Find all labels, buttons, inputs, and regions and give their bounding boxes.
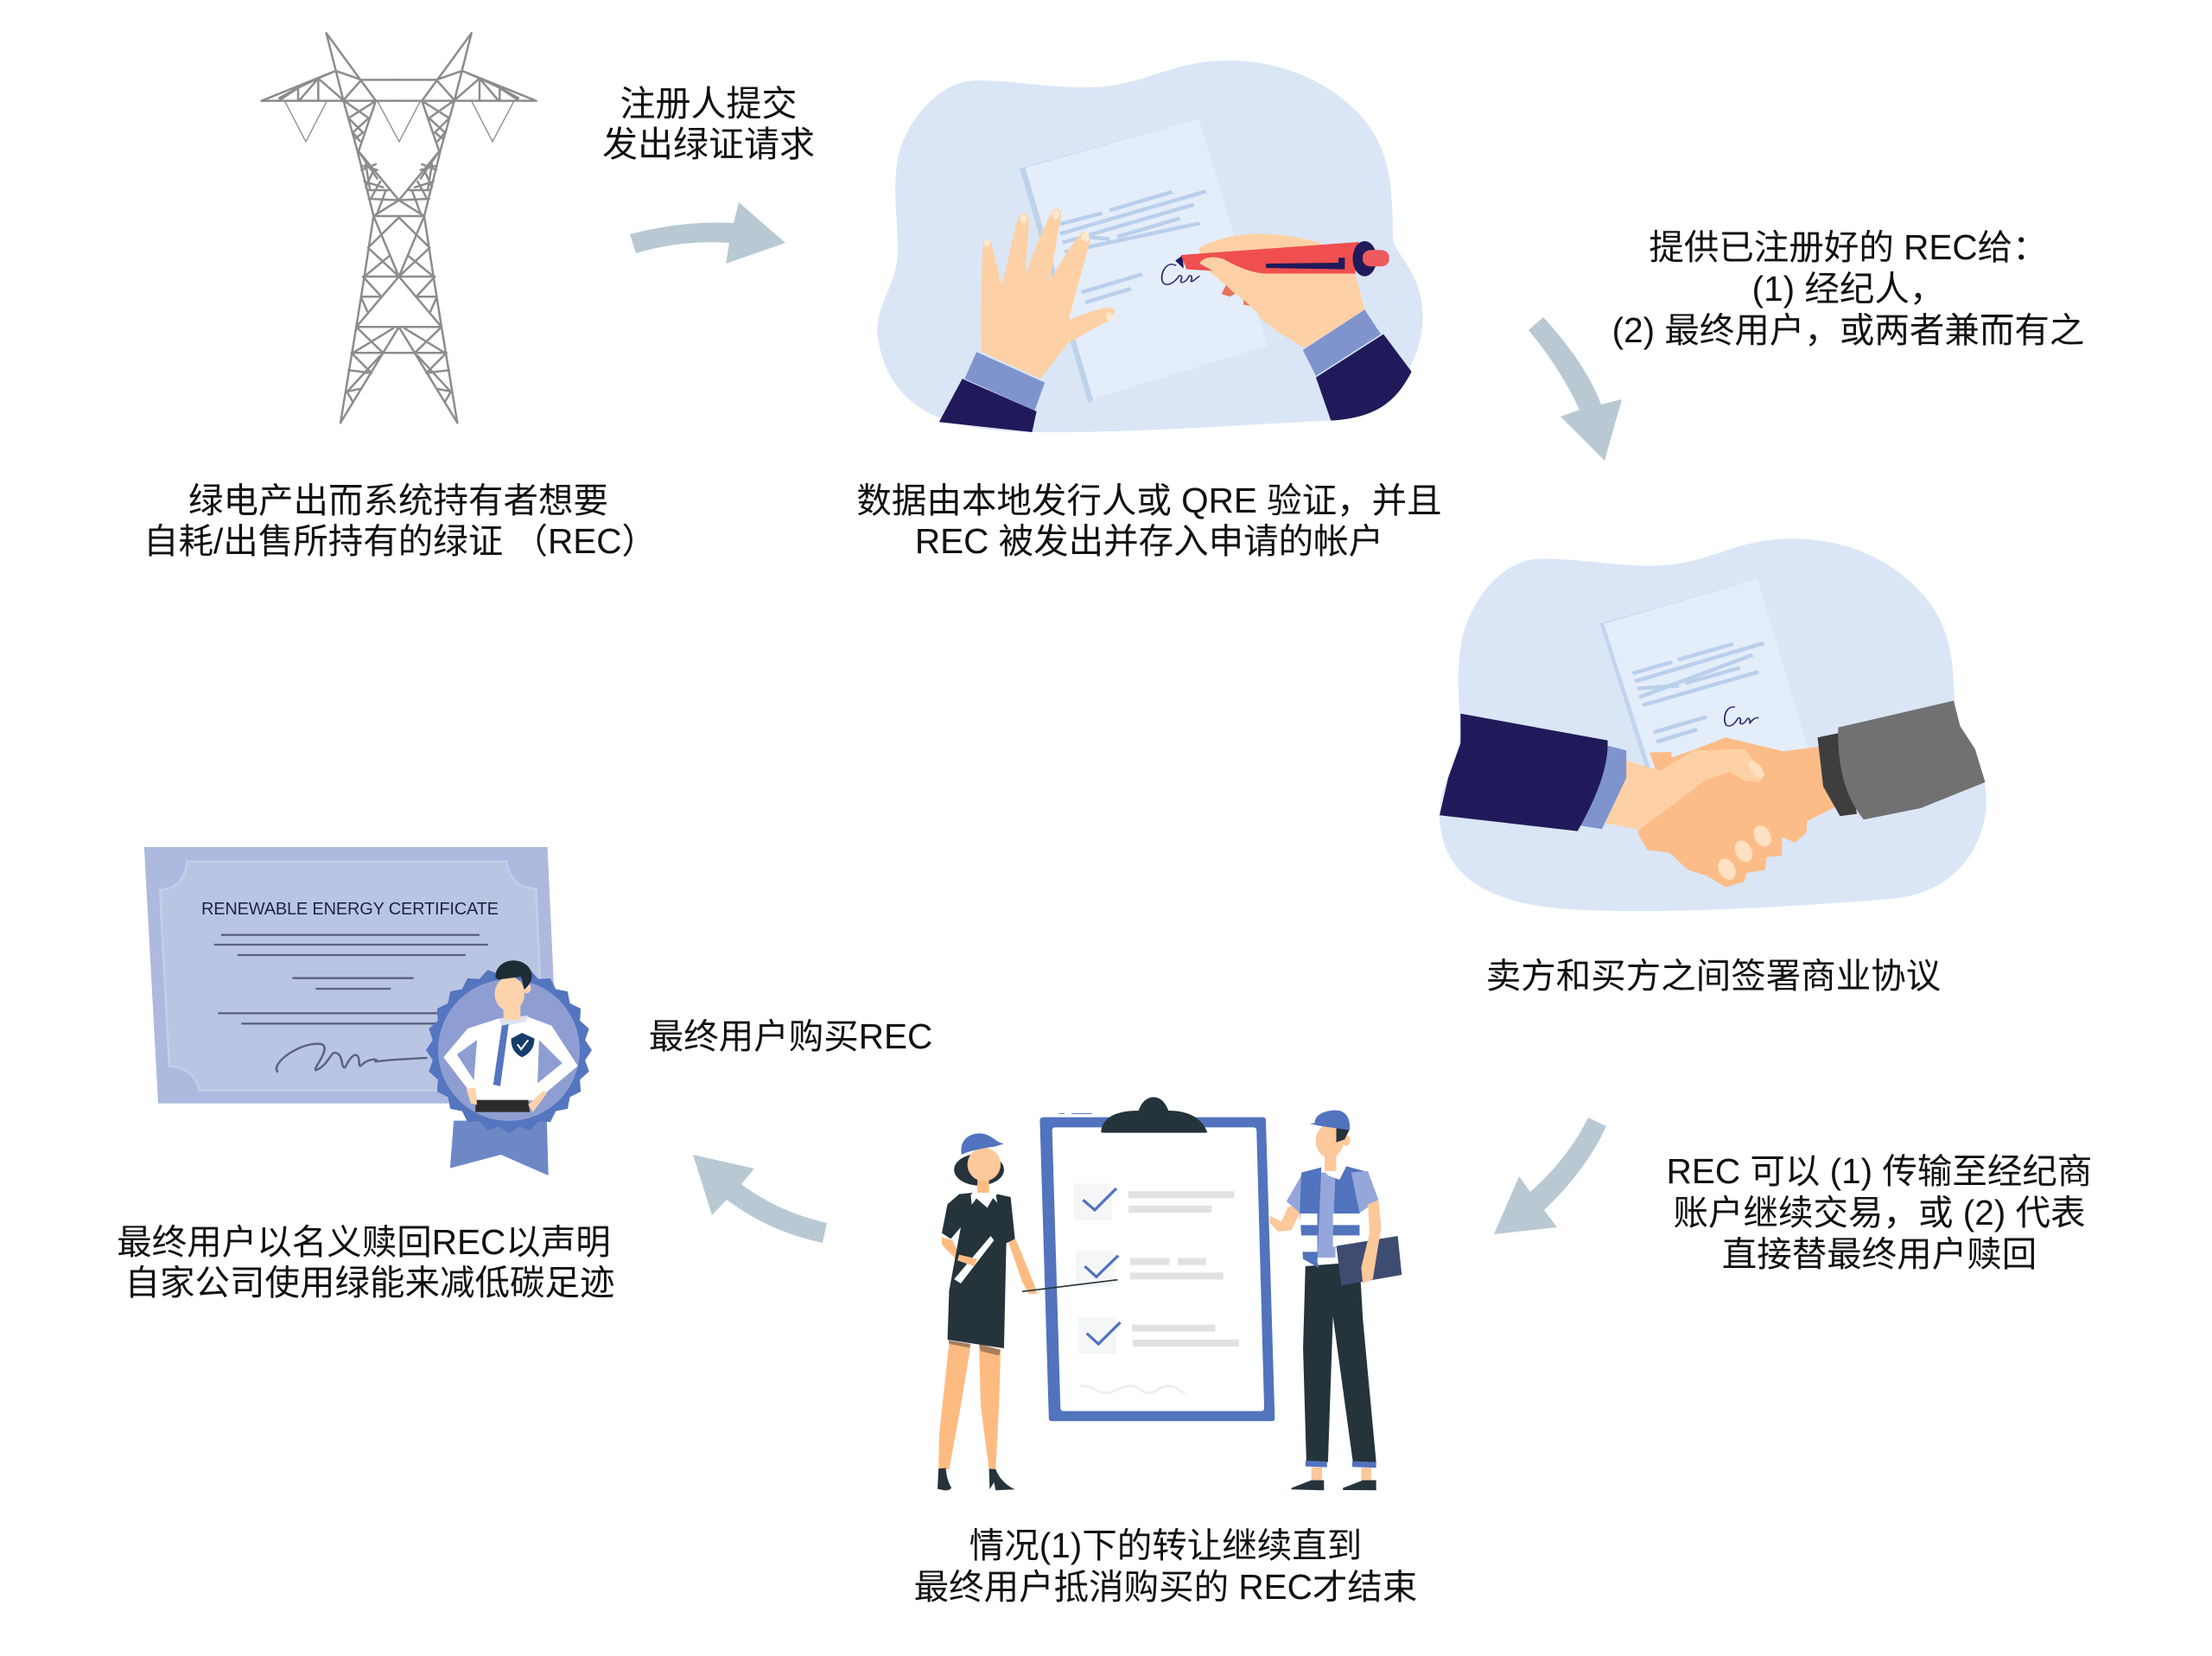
text: step 2 verification: REC 被发出并存入申请的帐户 [915, 521, 1383, 561]
text: step 5 offset [914, 1525, 1417, 1607]
text: step 4 transfer: 直接替最终用户赎回 [1722, 1234, 2037, 1274]
text: step 2 verification: 数据由本地发行人或 QRE 验证，并且 [856, 481, 1442, 520]
woman with pointer [938, 1133, 1117, 1490]
certificate lines [214, 935, 488, 1023]
worker with folder [1270, 1111, 1402, 1490]
text: step 2 verification [856, 481, 1442, 561]
badge [426, 967, 592, 1133]
signature [276, 1044, 428, 1073]
text: step 3 provide REC: 提供已注册好的 REC给： [1649, 227, 2048, 267]
right sleeve [1818, 701, 1986, 819]
text: step 1 caption: 绿电产出而系统持有者想要 [188, 481, 608, 520]
text: step 6 redeem: 最终用户以名义赎回REC以声明 [117, 1222, 611, 1262]
text: step 4 transfer: REC 可以 (1) 传输至经纪商 [1667, 1151, 2092, 1191]
icon: transmission tower [262, 33, 537, 423]
text: step 1 caption: 自耗/出售所持有的绿证 （REC） [143, 521, 657, 561]
text: step 1 request: 注册人提交 [620, 84, 797, 124]
arrow: signing to handshake [1529, 317, 1622, 461]
certificate paper [144, 847, 559, 1104]
text: step 1 request: 发出绿证请求 [602, 124, 815, 164]
text: step 4 transfer [1667, 1151, 2092, 1274]
certificate title: RENEWABLE ENERGY CERTIFICATE [201, 900, 499, 919]
text: step 1 caption [143, 481, 657, 561]
text: end user buys: 最终用户购买REC [649, 1016, 932, 1056]
blob background [1440, 538, 1986, 911]
arrow: handshake to checklist [1494, 1118, 1606, 1234]
text: step 3 provide REC: (1) 经纪人， [1752, 269, 1944, 309]
text: step 6 redeem: 自家公司使用绿能来减低碳足迹 [124, 1263, 615, 1303]
text: step 3 provide REC [1612, 227, 2084, 350]
illustration: checklist with two people [938, 1097, 1402, 1490]
certificate frame [160, 862, 543, 1091]
man in badge [443, 960, 578, 1112]
ribbon [450, 1121, 549, 1175]
blob background [877, 61, 1423, 432]
arrow: tower to signing [630, 202, 785, 264]
text: step 3 provide REC: (2) 最终用户，或两者兼而有之 [1612, 310, 2084, 350]
right hand with pen [1175, 234, 1412, 421]
illustration: signing document [877, 61, 1423, 432]
illustration: renewable energy certificate [144, 847, 592, 1175]
document [1600, 579, 1808, 769]
hands shaking [1594, 737, 1836, 888]
document [1020, 118, 1268, 404]
text: step 5 offset: 情况(1)下的转让继续直到 [969, 1525, 1362, 1565]
text: step 3 agreement: 卖方和买方之间签署商业协议 [1486, 956, 1941, 996]
text: step 4 transfer: 账户继续交易，或 (2) 代表 [1673, 1193, 2086, 1232]
illustration: handshake [1440, 538, 1986, 911]
arrow: checklist to certificate [693, 1155, 827, 1243]
clipboard [1039, 1097, 1274, 1421]
left hand [939, 209, 1115, 432]
text: step 1 request [602, 84, 815, 164]
text: step 5 offset: 最终用户抵消购买的 REC才结束 [914, 1567, 1417, 1607]
left sleeve [1440, 714, 1626, 831]
text: step 6 redeem [117, 1222, 615, 1303]
